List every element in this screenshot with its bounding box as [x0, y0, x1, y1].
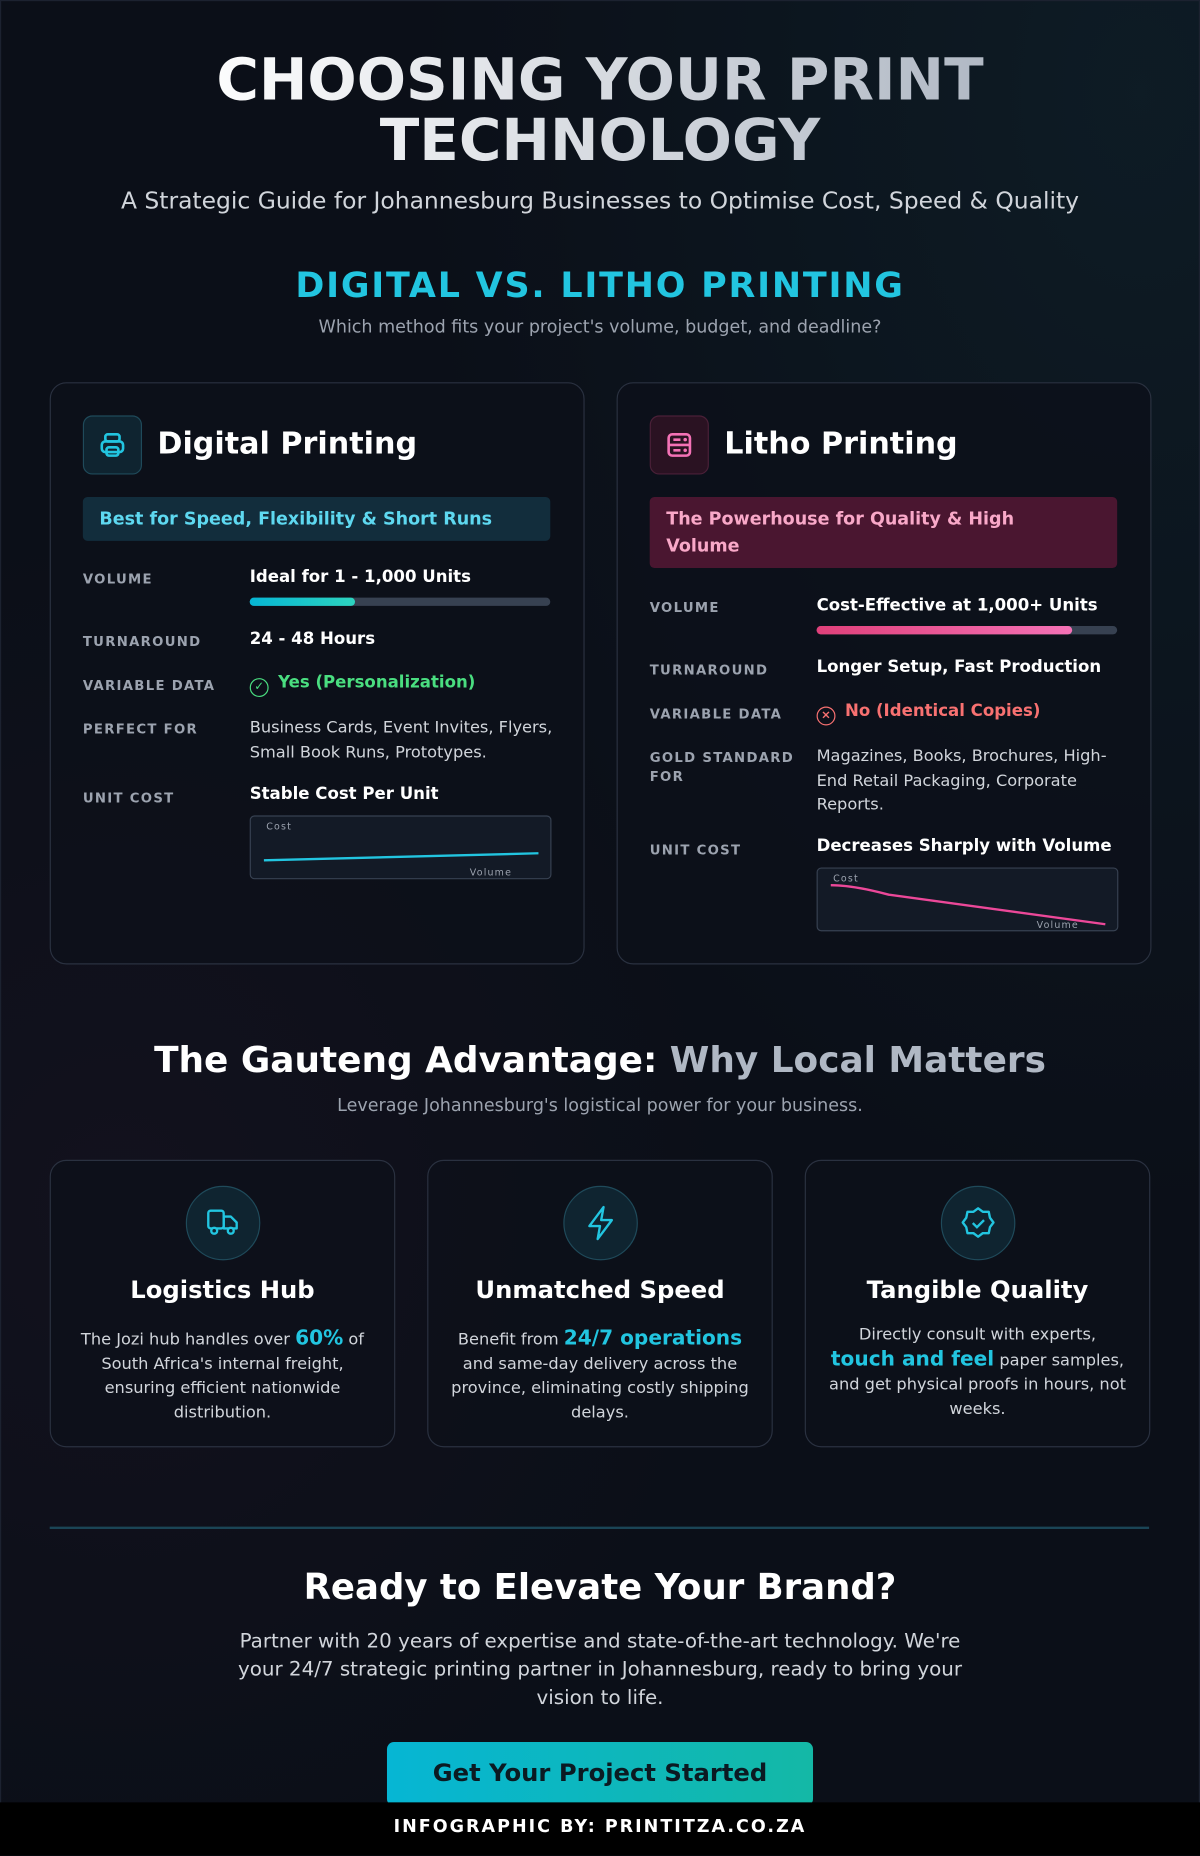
panel: digital printing: 24 - 48 Hours [250, 630, 375, 649]
heading: Unmatched Speed [475, 1276, 725, 1304]
cta text: Partner with 20 years of expertise and state-of-the-art technology. We're your 24/7 strategic printing partner in Johannesburg, ready to bring your vision to life. [238, 1628, 962, 1709]
title: TECHNOLOGY [380, 107, 820, 174]
panel: digital printing [50, 382, 585, 964]
icon: printer [83, 415, 142, 475]
panel: digital printing: Stable Cost Per Unit [250, 785, 439, 804]
no indicator: No (Identical Copies) [845, 702, 1040, 721]
title [186, 50, 1014, 170]
icon: server [650, 415, 709, 475]
button [387, 1742, 813, 1806]
panel: digital printing: Small Book Runs, Prototypes. [250, 743, 487, 762]
panel: litho printing: End Retail Packaging, Corporate [817, 771, 1077, 790]
yes indicator: Yes (Personalization) [278, 673, 475, 692]
bar: volume [250, 598, 550, 606]
panel: litho printing: Decreases Sharply with Volume [817, 837, 1112, 856]
text: Benefit from 24/7 operations and same-day delivery across the province, eliminating costly shipping delays. [451, 1327, 749, 1422]
heading: Litho Printing [724, 426, 958, 462]
title: CHOOSING YOUR PRINT [216, 46, 984, 114]
cta heading: Ready to Elevate Your Brand? [304, 1567, 896, 1608]
panel: litho printing: VARIABLE DATA [650, 707, 782, 722]
footer [0, 1802, 1200, 1856]
section subheading: Leverage Johannesburg's logistical power for your business. [337, 1096, 863, 1116]
section heading: digital vs litho: DIGITAL VS. LITHO PRINTING [295, 265, 905, 305]
tag: The Powerhouse for Quality & High [666, 509, 1014, 529]
text: and get physical proofs in hours, not [829, 1375, 1126, 1394]
subtitle: A Strategic Guide for Johannesburg Businesses to Optimise Cost, Speed & Quality [121, 187, 1079, 214]
heading: Logistics Hub [130, 1276, 315, 1304]
section heading: gauteng advantage: The Gauteng Advantage: Why Local Matters [154, 1040, 1046, 1082]
bar: volume [817, 626, 1117, 634]
text [829, 1325, 1126, 1418]
tag [650, 497, 1117, 568]
section subheading: Which method fits your project's volume, budget, and deadline? [319, 317, 881, 337]
panel: litho printing: UNIT COST [650, 843, 741, 858]
panel: litho printing: VOLUME [650, 600, 720, 615]
panel: litho printing: Longer Setup, Fast Production [817, 658, 1101, 677]
chart: decreasing cost: Cost [833, 874, 859, 885]
no indicator [816, 702, 1040, 726]
no indicator: × [821, 709, 831, 722]
panel: litho printing: Magazines, Books, Brochures, High- [817, 747, 1107, 766]
panel: digital printing: PERFECT FOR [83, 722, 198, 737]
panel: tangible quality [805, 1160, 1150, 1447]
panel: digital printing: VOLUME [83, 572, 153, 587]
chart: stable cost [250, 815, 551, 879]
tag: Volume [666, 536, 739, 556]
chart: stable cost: Cost [266, 822, 292, 833]
panel: litho printing: TURNAROUND [650, 663, 768, 678]
tag: Best for Speed, Flexibility & Short Runs [99, 509, 492, 529]
icon: lightning [563, 1186, 638, 1260]
yes indicator [250, 673, 475, 697]
heading: Tangible Quality [867, 1276, 1088, 1304]
icon: badge check [941, 1186, 1015, 1260]
panel: unmatched speed [427, 1160, 773, 1447]
footer: INFOGRAPHIC BY: PRINTITZA.CO.ZA [394, 1817, 806, 1837]
panel: litho printing: Reports. [817, 795, 884, 814]
panel: digital printing: Ideal for 1 - 1,000 Units [250, 568, 471, 587]
text: touch and feel paper samples, [831, 1347, 1124, 1371]
text: Directly consult with experts, [859, 1325, 1096, 1344]
heading: Digital Printing [157, 426, 417, 462]
panel: litho printing: FOR [650, 769, 684, 785]
tag [83, 497, 550, 541]
text: weeks. [949, 1399, 1006, 1418]
yes indicator: ✓ [254, 680, 264, 693]
icon: truck [186, 1186, 260, 1260]
panel: digital printing: TURNAROUND [83, 634, 201, 650]
panel: litho printing: GOLD STANDARD [650, 750, 794, 766]
panel: litho printing: Cost-Effective at 1,000+ Units [817, 596, 1098, 615]
panel: digital printing: VARIABLE DATA [83, 678, 215, 693]
panel: litho printing [617, 382, 1151, 964]
chart: decreasing cost [817, 867, 1118, 931]
panel: logistics hub [50, 1160, 395, 1447]
button: Get Your Project Started [433, 1759, 767, 1787]
text: The Jozi hub handles over 60% of South Africa's internal freight, ensuring efficient nationwide distribution. [81, 1327, 364, 1422]
panel: digital printing: Business Cards, Event Invites, Flyers, [250, 718, 552, 737]
panel: digital printing: UNIT COST [83, 791, 175, 806]
